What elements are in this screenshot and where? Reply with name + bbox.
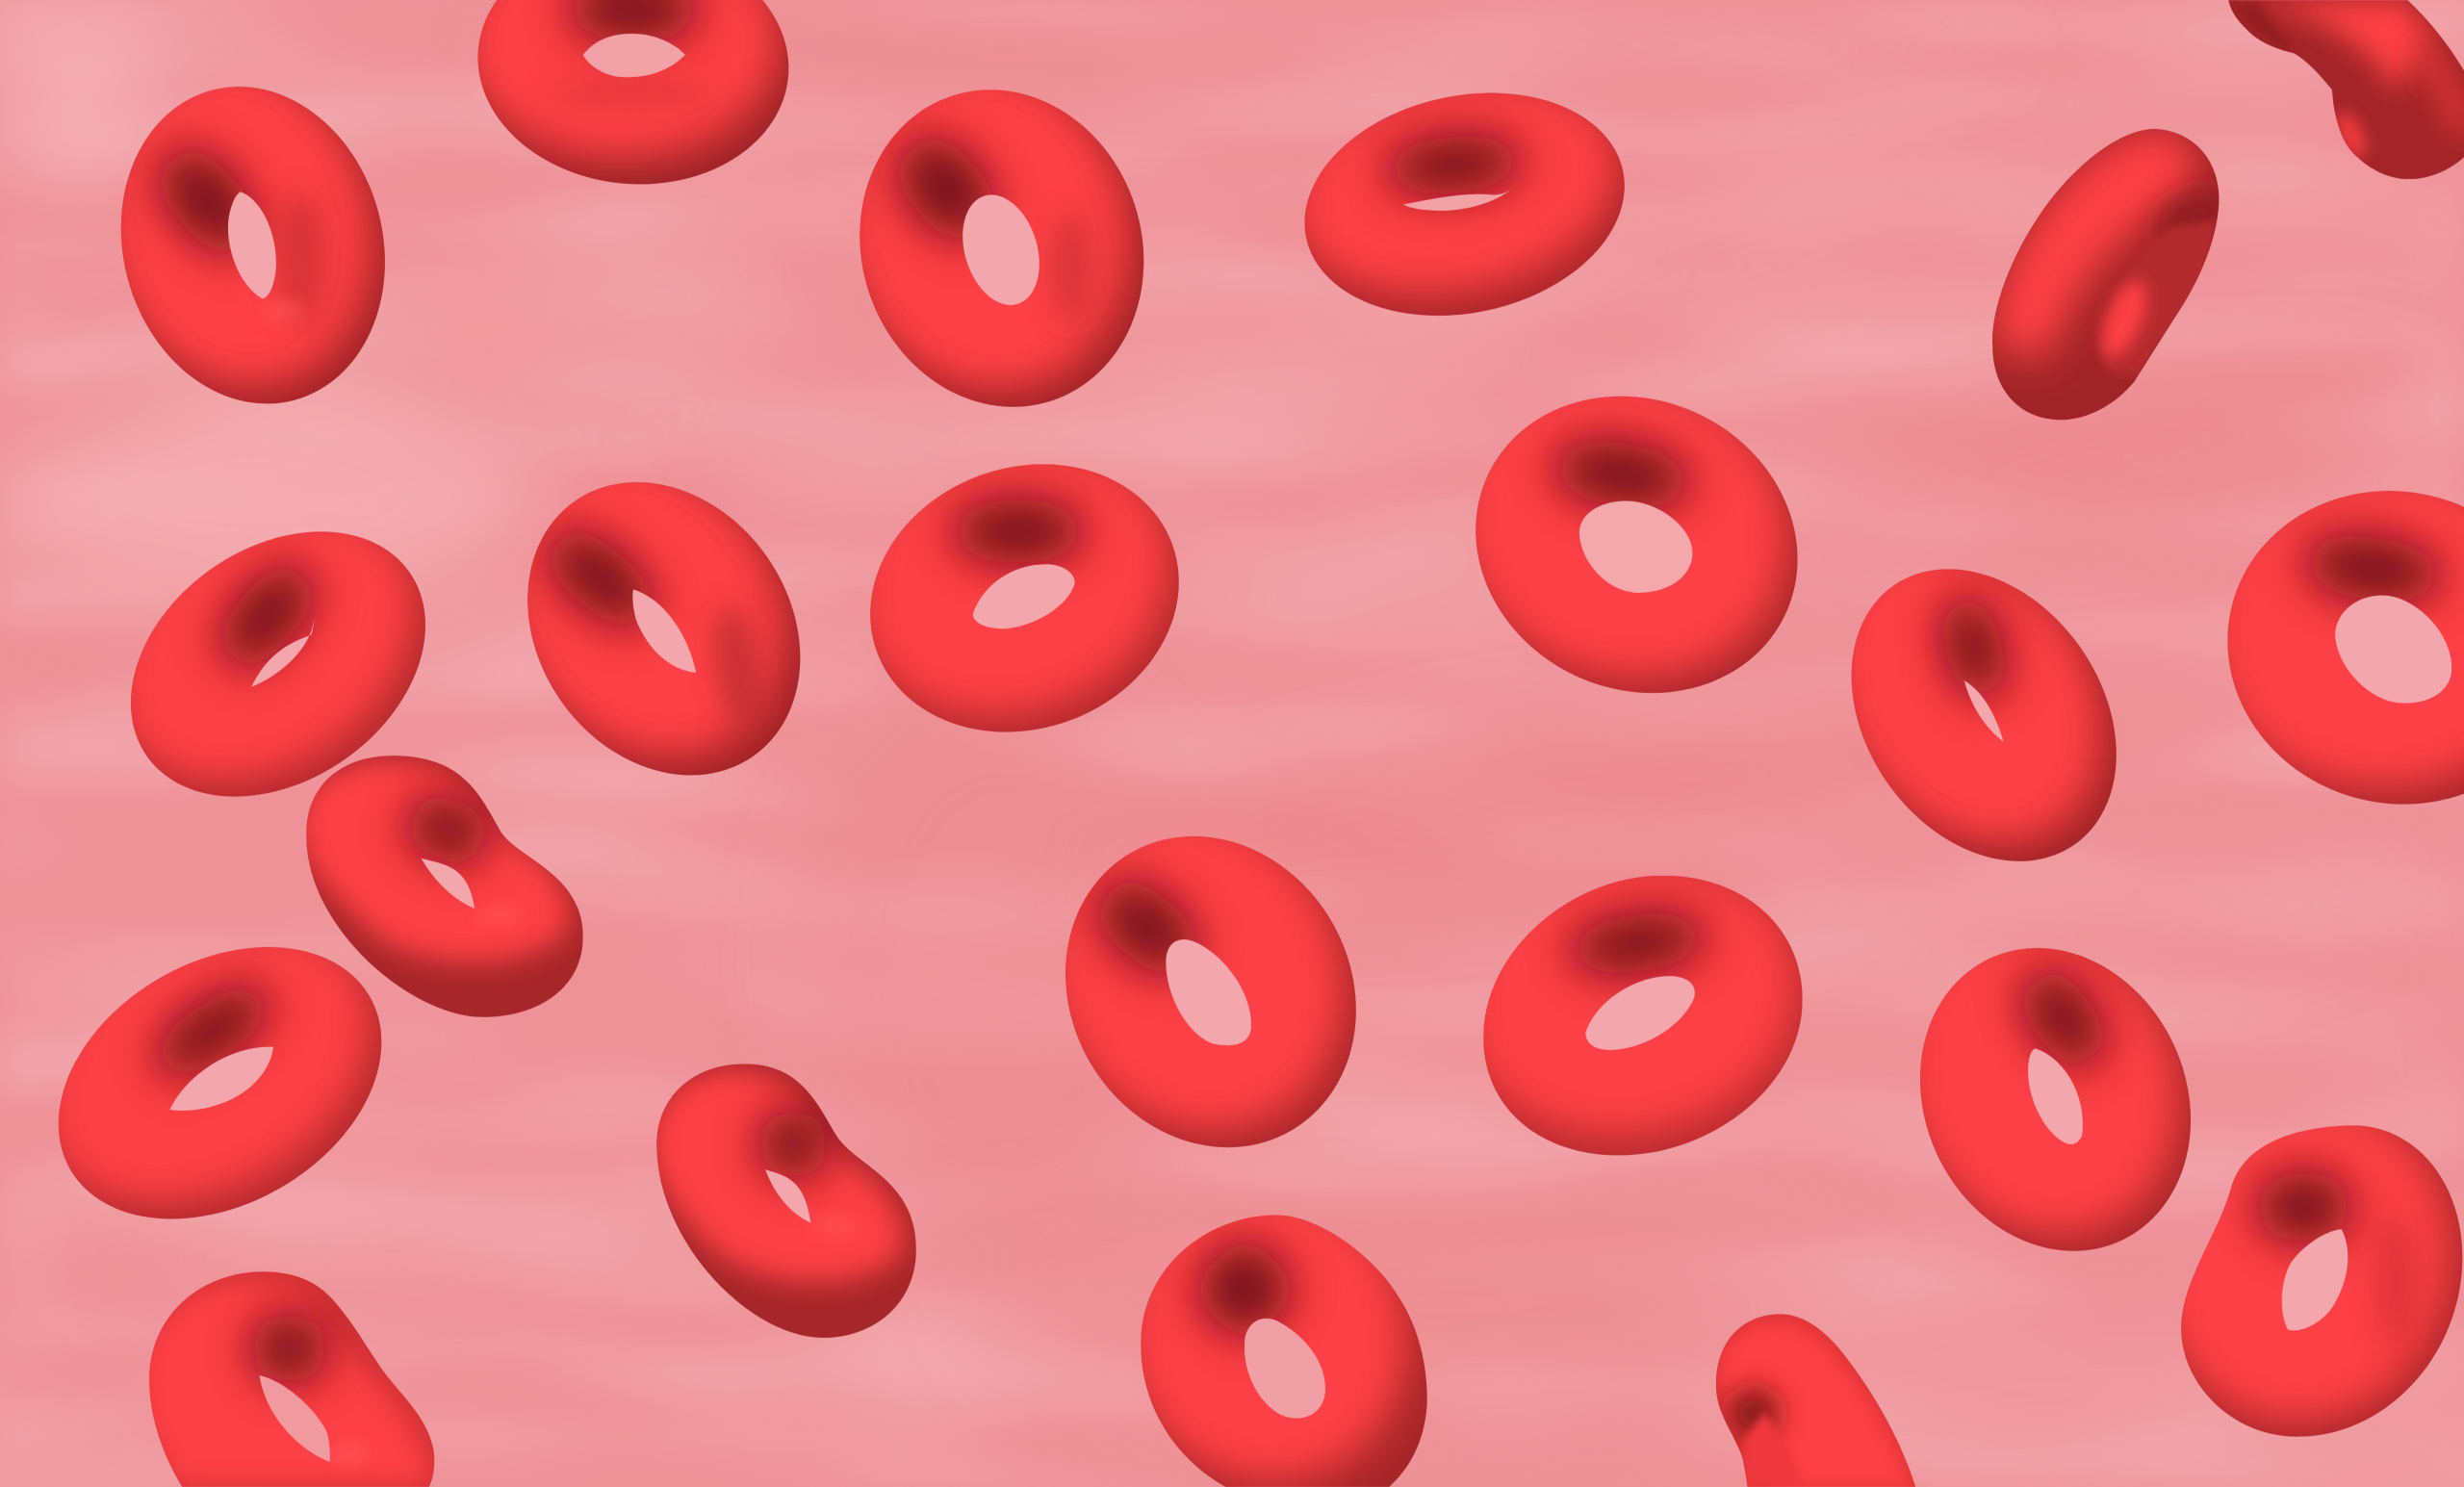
cell 11 bbox=[1773, 492, 2159, 898]
cell 4 bbox=[1305, 92, 1625, 316]
cell 16 bbox=[987, 756, 1402, 1187]
hole bbox=[632, 589, 696, 673]
back lobe shadow bbox=[2237, 1, 2289, 48]
hole bbox=[950, 185, 1052, 315]
cell 20 bbox=[1077, 1141, 1452, 1487]
cell 1 bbox=[121, 87, 385, 404]
hole bbox=[251, 616, 315, 687]
cell 8 bbox=[446, 400, 843, 813]
cell 9 bbox=[813, 396, 1210, 761]
hole bbox=[228, 192, 276, 298]
hole bbox=[2028, 1048, 2083, 1144]
hole bbox=[422, 859, 475, 909]
cell 3 bbox=[860, 90, 1143, 407]
cell 10 bbox=[1404, 317, 1839, 733]
hole bbox=[259, 1375, 330, 1462]
cell 17 bbox=[1435, 826, 1824, 1167]
hole bbox=[973, 564, 1075, 628]
cell 13: kidney shape bbox=[297, 747, 591, 1026]
hole bbox=[2282, 1229, 2348, 1330]
cell 12 bbox=[2206, 469, 2464, 817]
hole bbox=[583, 34, 685, 77]
cell 14 bbox=[0, 866, 423, 1262]
hole bbox=[1166, 939, 1251, 1045]
hole bbox=[1964, 680, 2004, 742]
hole bbox=[1579, 500, 1692, 593]
hole bbox=[2335, 596, 2451, 704]
cell 2 bbox=[477, 0, 789, 185]
hole bbox=[1245, 1319, 1325, 1419]
cell 7 bbox=[60, 452, 469, 840]
cell 6 bbox=[1992, 129, 2220, 420]
hole bbox=[765, 1169, 810, 1223]
hole bbox=[1585, 976, 1695, 1050]
hole bbox=[169, 1047, 273, 1111]
cell 18 bbox=[1850, 878, 2230, 1282]
hole bbox=[1403, 182, 1518, 211]
inner cavity bbox=[2093, 220, 2219, 377]
cell 15: kidney shape bbox=[648, 1053, 924, 1346]
cell 22: bottom, cropped bbox=[1709, 1308, 1920, 1487]
cell 19 bbox=[2118, 1064, 2464, 1457]
cell 5: top right, cropped bbox=[2216, 0, 2464, 189]
cell 21: bottom left, cropped bbox=[138, 1266, 440, 1487]
